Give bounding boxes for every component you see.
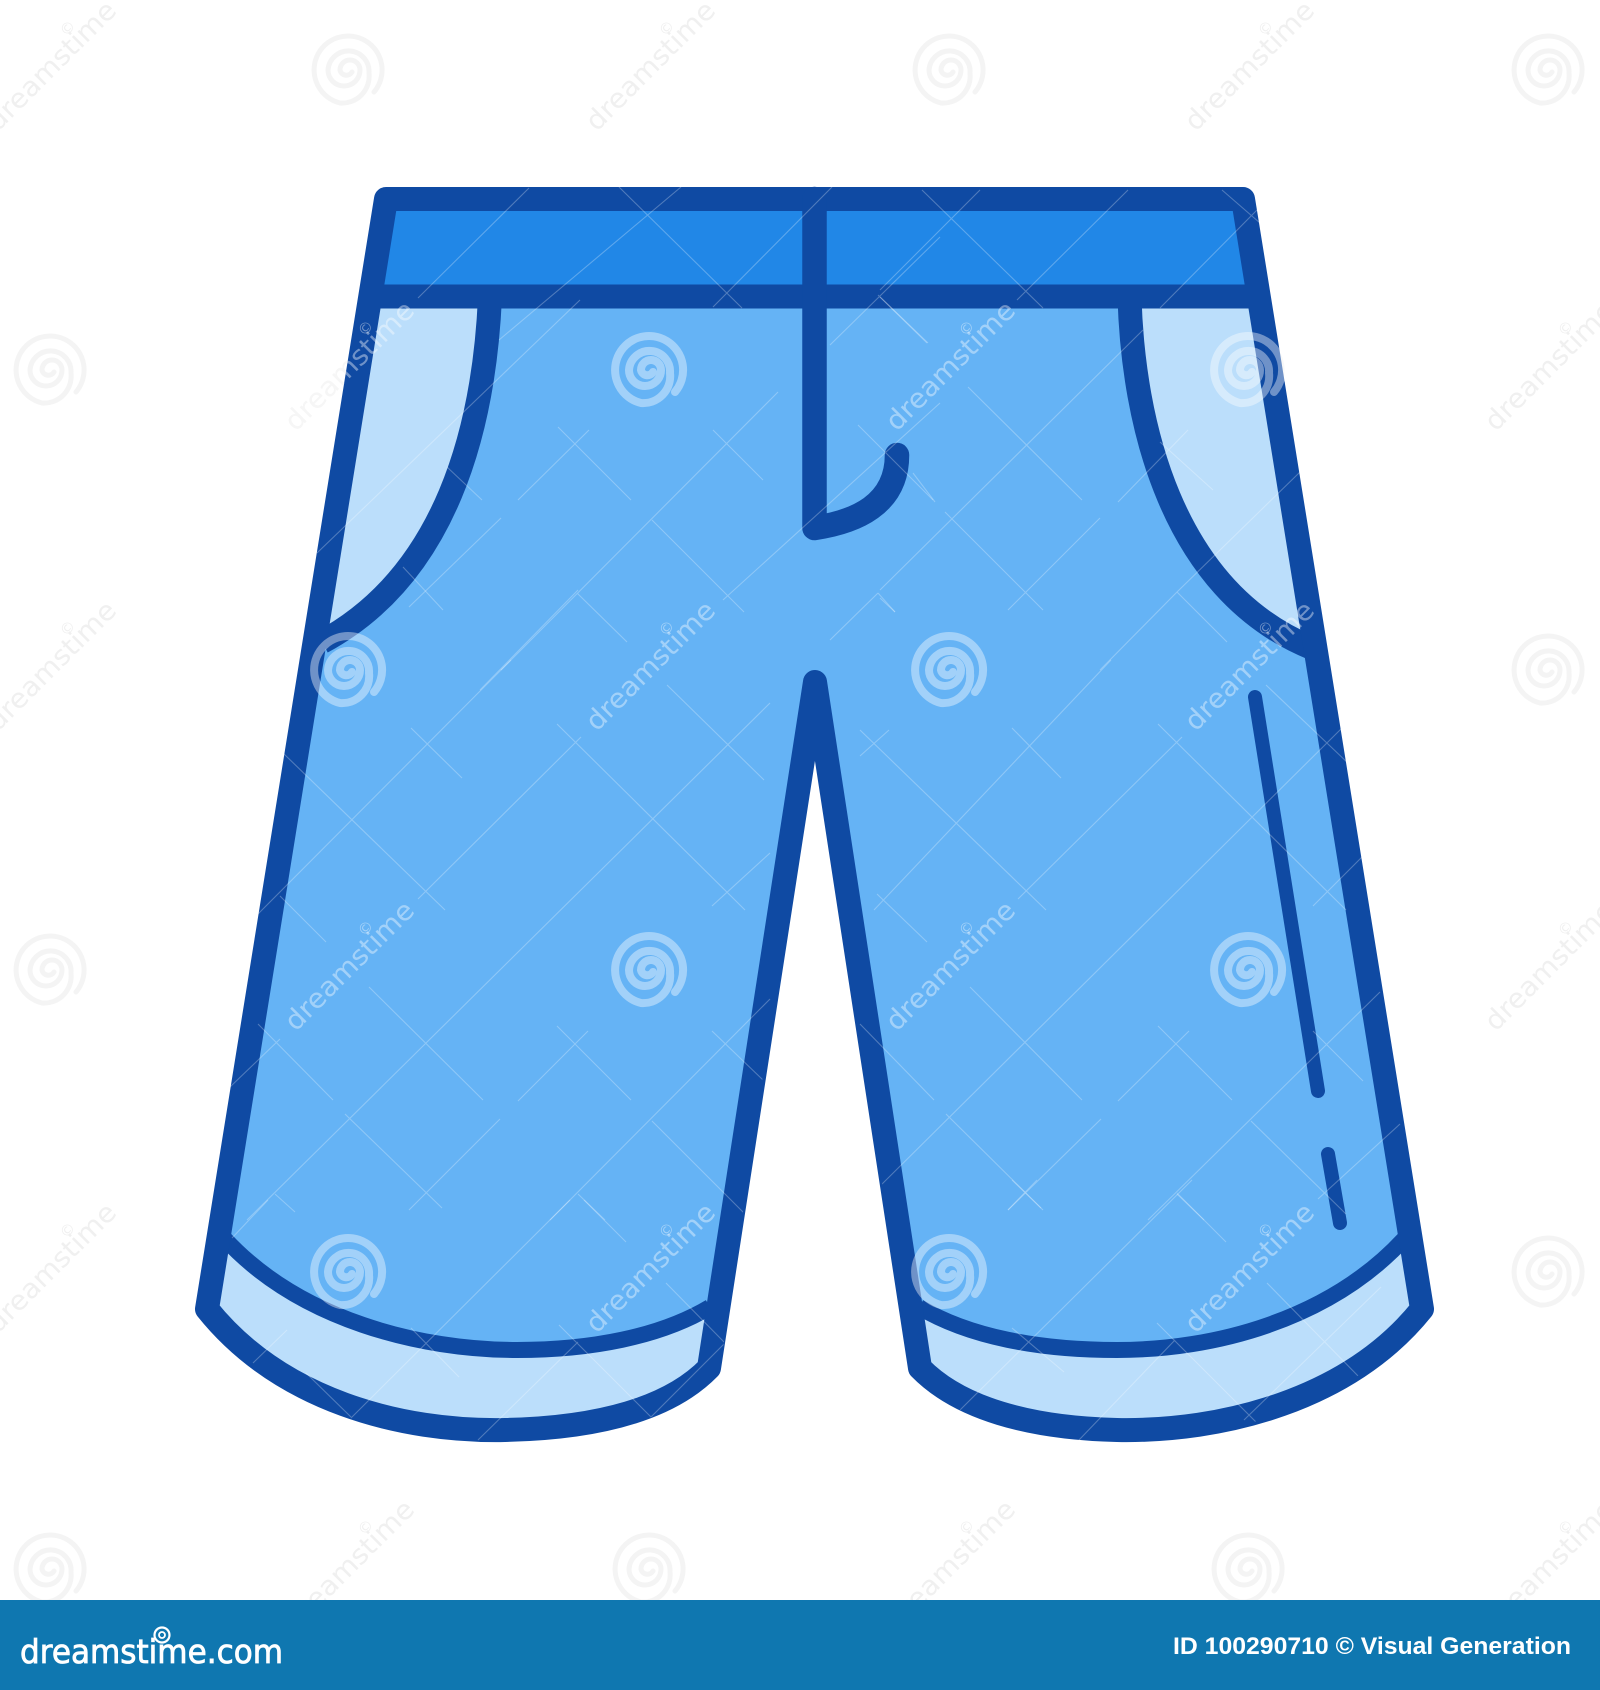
waistband fill <box>383 211 1246 285</box>
watermark over shorts: dreamstime <box>580 595 722 737</box>
fly seam <box>814 199 897 528</box>
watermark over shorts: © <box>354 917 377 940</box>
watermark over shorts: © <box>655 1219 678 1242</box>
background watermark pattern: © <box>1554 1516 1577 1539</box>
watermark over shorts: © <box>955 317 978 340</box>
background watermark pattern: © <box>1554 917 1577 940</box>
right cuff fill <box>919 1239 1422 1430</box>
watermark over shorts: dreamstime <box>279 295 421 437</box>
watermark over shorts <box>272 289 1321 1339</box>
right cuff seam <box>919 1239 1404 1350</box>
background watermark pattern: dreamstime <box>1179 0 1321 137</box>
shorts body fill <box>207 199 1422 1430</box>
side crease short <box>1328 1154 1340 1223</box>
background watermark pattern: © <box>1554 317 1577 340</box>
background watermark pattern: © <box>1254 17 1277 40</box>
right pocket fill <box>1130 305 1303 634</box>
watermark over shorts: dreamstime <box>580 1197 722 1339</box>
left pocket outline <box>322 297 490 642</box>
background watermark pattern: dreamstime <box>279 1494 421 1636</box>
watermark over shorts: © <box>1254 617 1277 640</box>
watermark over shorts: © <box>1254 1219 1277 1242</box>
shorts outline <box>207 199 1422 1430</box>
watermark over shorts: © <box>955 917 978 940</box>
left cuff fill <box>207 1239 710 1430</box>
watermark over shorts: dreamstime <box>880 295 1022 437</box>
right pocket outline <box>1130 297 1312 648</box>
waistband lower edge <box>376 284 1253 308</box>
background watermark pattern: © <box>955 1516 978 1539</box>
background watermark pattern: dreamstime <box>880 1494 1022 1636</box>
left pocket fill <box>326 305 490 632</box>
footer bar <box>0 1600 1600 1690</box>
image credit: ID 100290710 © Visual Generation <box>1173 1633 1571 1660</box>
background watermark pattern: © <box>354 1516 377 1539</box>
watermark over shorts: dreamstime <box>279 895 421 1037</box>
watermark over shorts: © <box>354 317 377 340</box>
watermark over shorts: dreamstime <box>1179 595 1321 737</box>
background watermark pattern: © <box>655 17 678 40</box>
watermark over shorts: dreamstime <box>880 895 1022 1037</box>
footer logo: dreamstime.com <box>20 1632 283 1671</box>
background watermark pattern: © <box>56 17 79 40</box>
watermark over shorts: © <box>655 617 678 640</box>
background watermark pattern: © <box>56 1219 79 1242</box>
background watermark pattern: dreamstime <box>279 295 421 437</box>
background watermark pattern: dreamstime <box>580 0 722 137</box>
shorts icon <box>207 199 1422 1430</box>
background watermark pattern: © <box>56 617 79 640</box>
side crease long <box>1255 697 1318 1091</box>
watermark over shorts: dreamstime <box>1179 1197 1321 1339</box>
fabric watermark lines <box>230 187 1400 1440</box>
left cuff seam <box>225 1239 710 1350</box>
